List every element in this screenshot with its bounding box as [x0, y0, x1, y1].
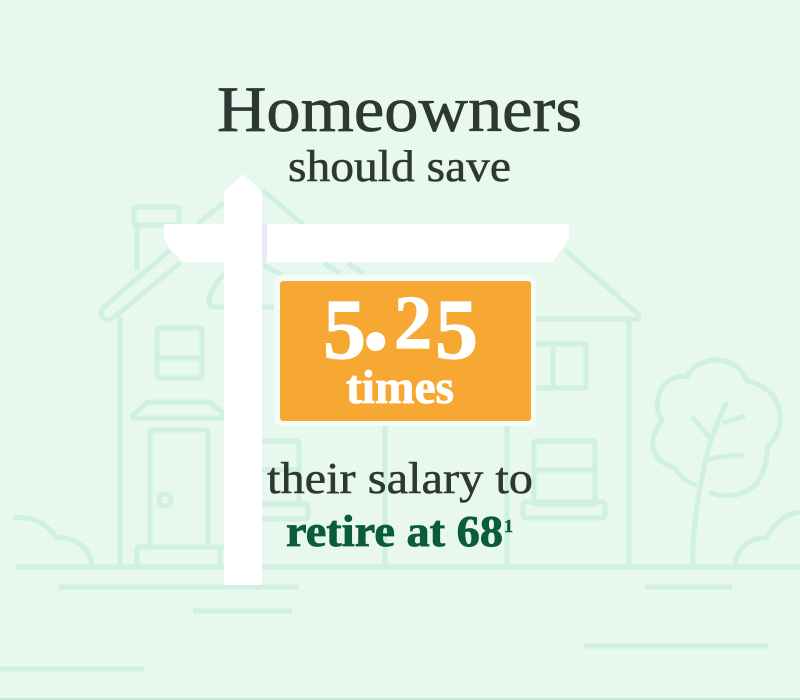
title — [217, 74, 582, 191]
big number: 5 — [435, 281, 478, 377]
highlighted text: retire at 68 — [286, 507, 503, 556]
closing text: their salary to — [267, 454, 533, 503]
icon: chimney — [134, 207, 179, 270]
subtitle: should save — [288, 142, 511, 191]
ground lines — [0, 567, 800, 669]
icon: tree — [653, 360, 780, 565]
background illustration: house and landscape — [0, 190, 800, 669]
times label: times — [346, 361, 454, 414]
icon: upper left window — [157, 328, 202, 378]
sign beam — [164, 224, 569, 262]
sign post — [164, 174, 569, 585]
orange sign card — [274, 251, 536, 426]
big number: 5 — [323, 281, 366, 377]
closing text — [267, 454, 533, 556]
icon: lower centre window — [262, 441, 308, 519]
title: Homeowners — [217, 74, 582, 146]
beam shadow — [262, 224, 267, 262]
big number: 2 — [394, 281, 432, 365]
big number: . — [362, 251, 390, 373]
icon: left bush — [13, 517, 92, 566]
icon: porch and door — [132, 402, 224, 566]
icon: house roof — [101, 190, 639, 320]
icon: right bush — [735, 512, 800, 566]
post — [224, 174, 262, 585]
footnote marker: 1 — [504, 516, 513, 536]
icon: lower right window — [523, 441, 605, 518]
icon: upper right window — [536, 344, 586, 388]
house walls — [120, 316, 629, 567]
